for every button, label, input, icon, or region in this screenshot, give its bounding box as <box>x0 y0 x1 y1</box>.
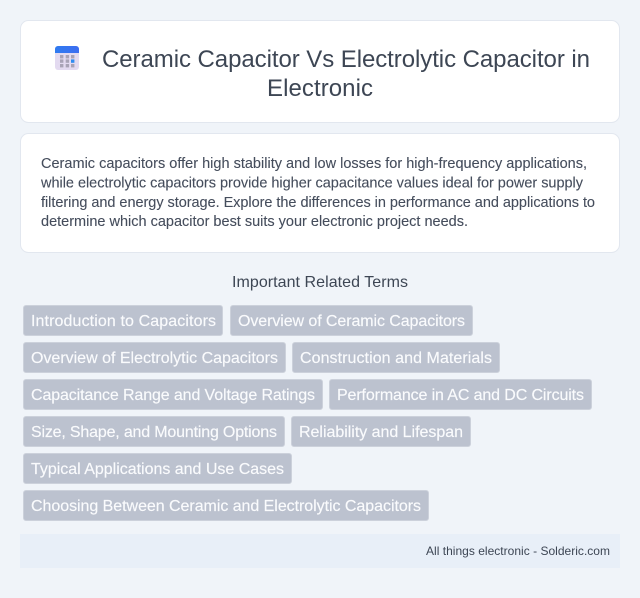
chip: ceramic overview: Overview of Ceramic Capacitors <box>238 313 465 330</box>
chip: ceramic overview <box>230 306 472 336</box>
chip: construction <box>292 342 500 372</box>
description text: filtering and energy storage. Explore the differences in performance and applications to <box>41 195 595 211</box>
description text: determine which capacitor best suits your electronic project needs. <box>41 214 468 230</box>
chip: choosing: Choosing Between Ceramic and Electrolytic Capacitors <box>31 498 421 515</box>
description text: Ceramic capacitors offer high stability and low losses for high-frequency applications, <box>41 156 587 172</box>
chip: applications <box>24 454 292 484</box>
chip: choosing <box>24 490 428 520</box>
chip: size and shape <box>24 416 284 446</box>
chip: size and shape: Size, Shape, and Mounting Options <box>31 424 277 441</box>
panel: title card <box>20 20 620 122</box>
heading: related terms: Important Related Terms <box>232 274 408 291</box>
icon: calendar <box>55 46 79 70</box>
chip: applications: Typical Applications and Use Cases <box>31 461 284 478</box>
title: Electronic <box>267 75 373 102</box>
footer credit: All things electronic - Solderic.com <box>426 544 610 558</box>
chip: introduction <box>24 306 222 336</box>
chip: reliability: Reliability and Lifespan <box>299 424 463 441</box>
footer <box>20 534 620 568</box>
chip: electrolytic overview <box>24 342 286 372</box>
chip: performance <box>330 380 592 410</box>
panel: description <box>20 134 620 252</box>
panel: term chips <box>24 306 592 520</box>
chip: electrolytic overview: Overview of Electrolytic Capacitors <box>31 350 278 367</box>
title <box>102 46 590 102</box>
chip: reliability <box>292 416 470 446</box>
chip: capacitance range: Capacitance Range and Voltage Ratings <box>31 387 315 404</box>
description text <box>40 156 595 230</box>
chip: capacitance range <box>24 380 322 410</box>
title: Ceramic Capacitor Vs Electrolytic Capacitor in <box>102 46 590 73</box>
chip: introduction: Introduction to Capacitors <box>31 313 216 330</box>
description text: while electrolytic capacitors provide higher capacitance values ideal for power supply <box>40 176 584 192</box>
chip: performance: Performance in AC and DC Circuits <box>337 387 584 404</box>
chip: construction: Construction and Materials <box>300 350 492 367</box>
